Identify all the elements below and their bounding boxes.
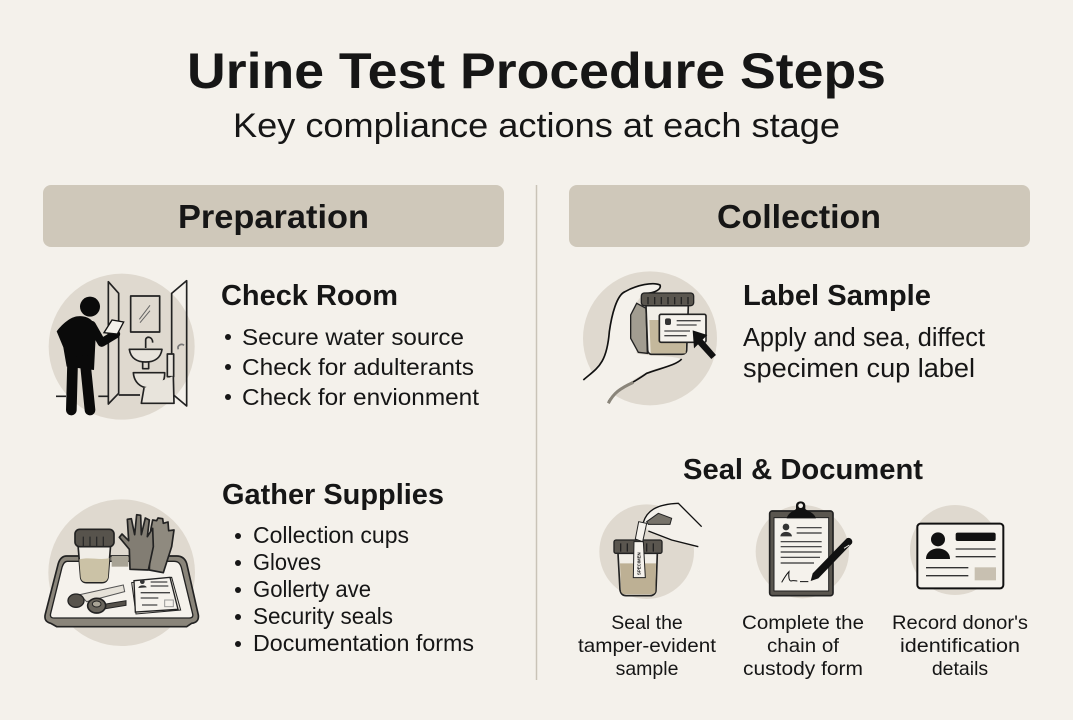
checklist: Secure water source — [242, 324, 464, 350]
checklist — [225, 324, 479, 410]
forms — [132, 577, 181, 614]
checklist: Check for envionment — [242, 384, 479, 410]
step heading: Check Room — [221, 280, 398, 312]
icon: clipboard form — [756, 501, 852, 598]
subtitle: Key compliance actions at each stage — [233, 107, 840, 145]
icon: person checking restroom — [49, 274, 195, 420]
checklist — [235, 522, 474, 656]
caption: Record donor's — [892, 612, 1028, 634]
icon: hand holding labeled cup — [583, 271, 717, 405]
panel: preparation — [43, 185, 504, 656]
panel: collection — [569, 185, 1030, 680]
checklist: Gloves — [253, 549, 321, 575]
caption: custody form — [743, 658, 863, 680]
step: gather supplies — [45, 479, 474, 656]
description — [743, 324, 985, 383]
caption — [892, 612, 1028, 680]
caption — [578, 612, 717, 680]
heading: collection: Collection — [717, 198, 881, 235]
step heading: Gather Supplies — [222, 479, 444, 511]
heading: collection — [569, 185, 1030, 247]
checklist: Documentation forms — [253, 630, 474, 656]
description: specimen cup label — [743, 355, 975, 383]
step heading: Label Sample — [743, 280, 931, 312]
step: seal and document — [578, 454, 1028, 680]
icon: supplies tray — [45, 499, 198, 646]
step heading: Seal & Document — [683, 454, 923, 486]
seals — [80, 585, 125, 602]
caption: Seal the — [611, 612, 683, 634]
caption: identification — [900, 635, 1020, 657]
checklist: Security seals — [253, 603, 393, 629]
checklist: Collection cups — [253, 522, 409, 548]
icon: id card — [910, 505, 1003, 595]
heading: preparation — [43, 185, 504, 247]
caption: sample — [616, 658, 678, 680]
title: Urine Test Procedure Steps — [187, 43, 886, 99]
step: check room — [49, 274, 479, 420]
caption: tamper-evident — [578, 635, 717, 657]
checklist: Gollerty ave — [253, 576, 371, 602]
tamper seal label: SPECIMEN — [637, 552, 642, 575]
caption: details — [932, 658, 988, 680]
heading: preparation: Preparation — [178, 198, 369, 235]
icon: sealing cup — [599, 503, 702, 599]
gloves — [149, 518, 174, 573]
cup — [78, 545, 111, 583]
description: Apply and sea, diffect — [743, 324, 985, 352]
caption — [742, 612, 864, 680]
step: label sample — [583, 271, 985, 405]
caption: chain of — [767, 635, 840, 657]
caption: Complete the — [742, 612, 864, 634]
checklist: Check for adulterants — [242, 354, 474, 380]
